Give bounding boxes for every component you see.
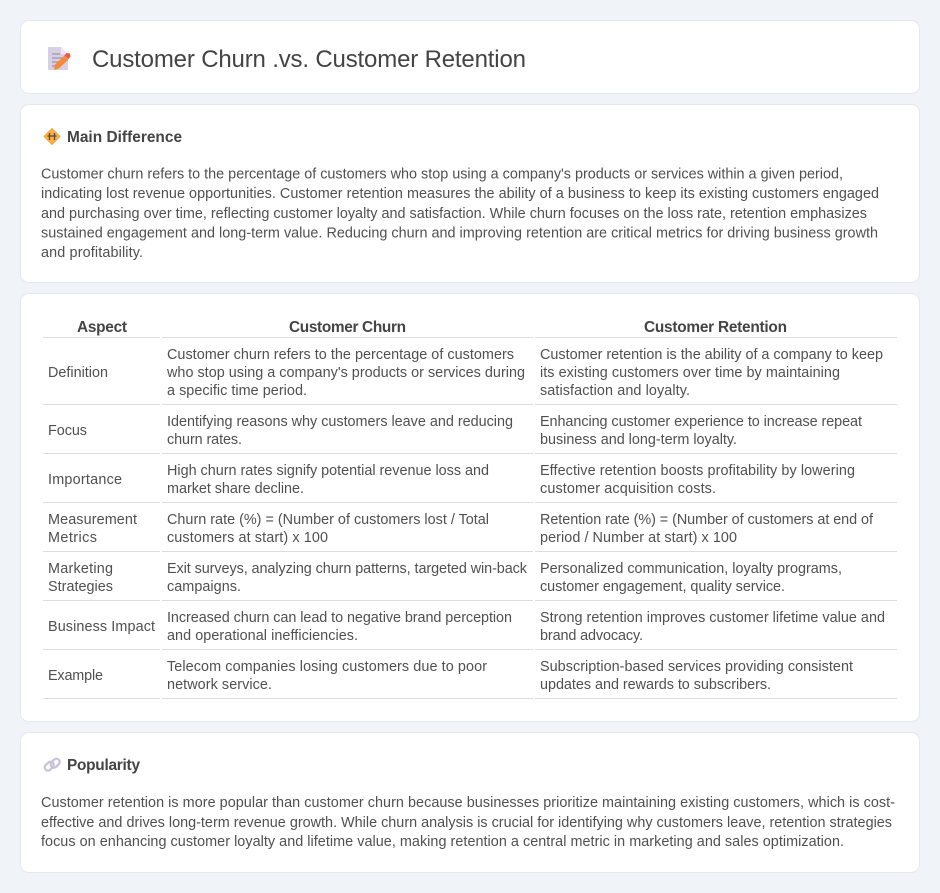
table row: example [43, 659, 897, 699]
table row: business impact: brand advocacy. [540, 628, 643, 644]
table row: measurement metrics: period / Number at start) x 100 [540, 530, 737, 546]
table row: measurement metrics: Retention rate (%) = (Number of customers at end of [540, 512, 874, 528]
heading: main difference: Main Difference [67, 129, 182, 146]
table row: business impact: and operational inefficiencies. [167, 628, 358, 644]
table row: focus: business and long-term loyalty. [540, 432, 737, 448]
icon: chain link [43, 757, 61, 772]
table row: focus: churn rates. [167, 432, 242, 448]
table row: measurement metrics: Measurement [48, 512, 137, 528]
table row: marketing strategies [43, 561, 897, 601]
icon: orange diamond [44, 128, 60, 144]
table row: definition [43, 347, 897, 405]
table header row: Customer Retention [644, 319, 787, 336]
table row: definition: who stop using a company's products or services during [166, 365, 525, 381]
table row: marketing strategies: Strategies [48, 579, 113, 595]
table row: definition: a specific time period. [167, 383, 307, 399]
table row: marketing strategies: customer engagement, quality service. [540, 579, 785, 595]
text block: main difference paragraph: indicating lost revenue opportunities. Customer retention measures the ability of a business to keep its existing customers engaged [41, 186, 879, 202]
table row: example: Telecom companies losing customers due to poor [167, 659, 487, 675]
text block: main difference paragraph [41, 167, 879, 261]
table row: business impact: Increased churn can lead to negative brand perception [167, 610, 512, 626]
table row: business impact: Business Impact [48, 619, 155, 635]
panel: comparison table [20, 294, 920, 722]
table header row: Customer Churn [289, 319, 406, 336]
table row: example: updates and rewards to subscribers. [540, 677, 771, 693]
table row: definition: its existing customers over time by maintaining [540, 365, 840, 381]
table row: focus [43, 414, 897, 454]
table row: marketing strategies: Marketing [48, 561, 113, 577]
table row: marketing strategies: Personalized communication, loyalty programs, [540, 561, 842, 577]
text block: popularity paragraph: Customer retention is more popular than customer churn because businesses prioritize maintaining existing customers, which is cost- [41, 795, 895, 811]
text block: popularity paragraph [41, 795, 895, 850]
table row: importance: market share decline. [167, 481, 304, 497]
text block: popularity paragraph: effective and drives long-term revenue growth. While churn analysis is crucial for identifying why customers leave, retention strategies [41, 815, 892, 831]
table row: measurement metrics: Metrics [48, 530, 97, 546]
table row: focus: Enhancing customer experience to increase repeat [540, 414, 862, 430]
text block: main difference paragraph: and purchasing over time, reflecting customer loyalty and satisfaction. While churn focuses on the loss rate, retention emphasizes [41, 206, 867, 222]
table row: importance: High churn rates signify potential revenue loss and [167, 463, 489, 479]
table row: importance: Importance [48, 472, 122, 488]
table row: definition: Customer retention is the ability of a company to keep [540, 347, 883, 363]
panel: title card [20, 20, 920, 94]
table row: definition: Definition [48, 365, 108, 381]
table header row: Aspect [77, 319, 127, 336]
table row: definition: satisfaction and loyalty. [540, 383, 690, 399]
table row: focus: Focus [48, 423, 87, 439]
table row: business impact: Strong retention improves customer lifetime value and [540, 610, 885, 626]
table row: marketing strategies: campaigns. [167, 579, 241, 595]
table row: importance: Effective retention boosts profitability by lowering [540, 463, 855, 479]
text block: main difference paragraph: sustained engagement and long-term value. Reducing churn and improving retention are critical metrics for driving business growth [41, 225, 878, 241]
table row: example: Subscription-based services providing consistent [540, 659, 853, 675]
text block: popularity paragraph: focus on enhancing customer loyalty and lifetime value, making retention a central metric in marketing and sales optimization. [41, 834, 844, 850]
table row: example: Example [48, 668, 103, 684]
table row: importance: customer acquisition costs. [540, 481, 716, 497]
text block: main difference paragraph: and profitability. [41, 245, 143, 261]
table row: definition: Customer churn refers to the percentage of customers [167, 347, 514, 363]
table row: measurement metrics [43, 512, 897, 552]
heading: popularity: Popularity [67, 757, 140, 774]
panel: popularity [20, 732, 920, 872]
table row: business impact [43, 610, 897, 650]
table row: measurement metrics: customers at start) x 100 [167, 530, 328, 546]
table row: marketing strategies: Exit surveys, analyzing churn patterns, targeted win-back [167, 561, 528, 577]
panel: main difference [20, 104, 920, 282]
text block: main difference paragraph: Customer churn refers to the percentage of customers who stop using a company's products or services within a given period, [41, 167, 843, 183]
table row: importance [43, 463, 897, 503]
table row: example: network service. [167, 677, 272, 693]
title: Customer Churn .vs. Customer Retention [92, 46, 526, 73]
icon: document with pencil [48, 47, 70, 70]
table row: focus: Identifying reasons why customers leave and reducing [167, 414, 513, 430]
table header row [43, 319, 897, 338]
table row: measurement metrics: Churn rate (%) = (Number of customers lost / Total [167, 512, 489, 528]
